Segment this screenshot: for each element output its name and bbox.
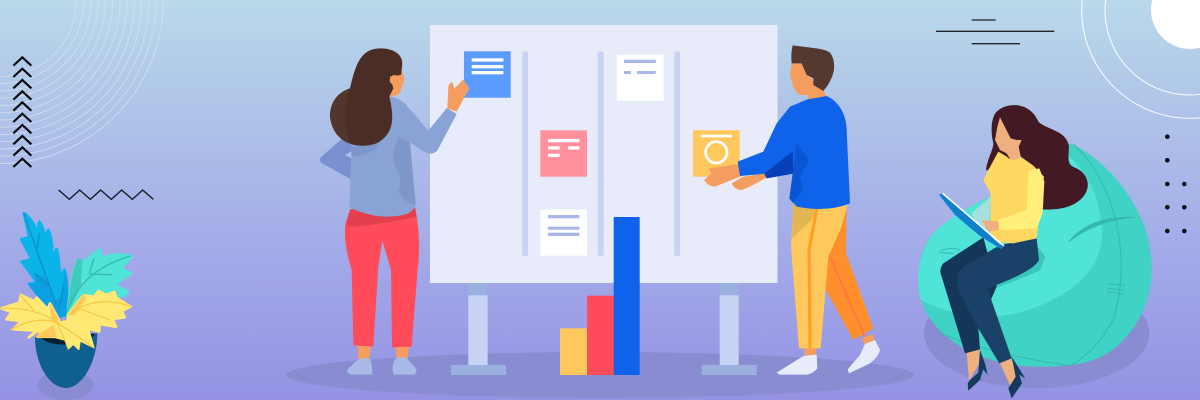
blue leaf	[21, 213, 67, 317]
torso and raised arm	[349, 97, 457, 217]
woman at board	[320, 48, 469, 375]
man at board	[704, 45, 880, 375]
dot grid	[1165, 134, 1187, 233]
sweater shading	[352, 137, 415, 205]
hair	[986, 105, 1088, 209]
floor shadow	[286, 352, 914, 398]
ear	[390, 75, 400, 85]
potted plant	[2, 213, 132, 400]
beanbag wedge	[972, 197, 991, 237]
yellow lower leaf	[37, 317, 94, 349]
white sticky note lower	[540, 210, 587, 256]
shoes	[347, 357, 417, 375]
blue leaf veins	[24, 213, 63, 310]
beanbag seams	[937, 144, 1125, 366]
thigh shadow	[987, 245, 1045, 289]
teal leaf	[68, 249, 132, 313]
board panel	[430, 25, 778, 283]
hair	[330, 48, 402, 146]
bar chart	[560, 217, 640, 375]
trousers	[345, 207, 419, 347]
sweater shade	[789, 143, 809, 203]
under arm	[764, 148, 795, 178]
hands	[704, 164, 767, 190]
hair shade	[330, 88, 352, 144]
pot opening	[41, 333, 95, 345]
pot	[35, 333, 97, 388]
blue leaf shade	[28, 270, 68, 318]
shoes	[777, 340, 880, 375]
lower legs skin	[967, 349, 1019, 389]
concentric arcs top right	[1082, 0, 1200, 118]
heels	[968, 350, 1025, 398]
board right leg	[702, 282, 757, 375]
white circle	[1151, 0, 1200, 49]
board	[430, 25, 778, 375]
front leg stripe	[809, 209, 817, 348]
tablet cover	[939, 193, 1003, 249]
zigzag line	[59, 190, 153, 199]
front leg	[791, 203, 847, 348]
beanbag shadow	[924, 278, 1149, 388]
concentric arcs top left	[0, 0, 164, 164]
blue sticky note	[464, 51, 511, 98]
yellow leaf shade and veins	[35, 294, 86, 338]
chevron stack	[13, 57, 31, 167]
beanbag	[918, 143, 1152, 367]
neck and ear	[387, 63, 405, 98]
beanbag crease	[1069, 217, 1136, 242]
sweater	[983, 152, 1044, 243]
far leg	[940, 237, 997, 353]
trousers shadow	[346, 207, 417, 227]
sleeve	[998, 168, 1044, 230]
ankles	[804, 334, 875, 357]
pink sticky note	[540, 130, 587, 177]
white sticky note upper	[617, 55, 664, 101]
rear leg	[825, 205, 873, 340]
near leg	[957, 238, 1039, 363]
yellow right leaf	[68, 291, 130, 331]
yellow sticky note	[693, 130, 740, 177]
rear leg stripe	[830, 257, 865, 337]
face and neck	[790, 63, 827, 101]
beanbag highlight	[918, 157, 1102, 317]
teal leaf shade and veins	[67, 258, 82, 315]
tablet	[939, 193, 1004, 249]
sweater	[738, 96, 850, 209]
horizontal dash lines	[936, 20, 1054, 44]
hands	[955, 213, 998, 232]
trousers shade	[792, 203, 817, 238]
raised hand	[447, 79, 469, 112]
ankles	[357, 345, 409, 361]
tablet page edge	[943, 193, 1004, 246]
far arm	[320, 132, 355, 182]
column dividers	[522, 52, 680, 256]
yellow left leaf	[2, 295, 59, 337]
seated woman on beanbag	[918, 105, 1152, 398]
hair	[791, 45, 834, 91]
face and neck	[995, 117, 1022, 162]
board left leg	[451, 282, 506, 375]
pot shadow	[38, 370, 93, 400]
